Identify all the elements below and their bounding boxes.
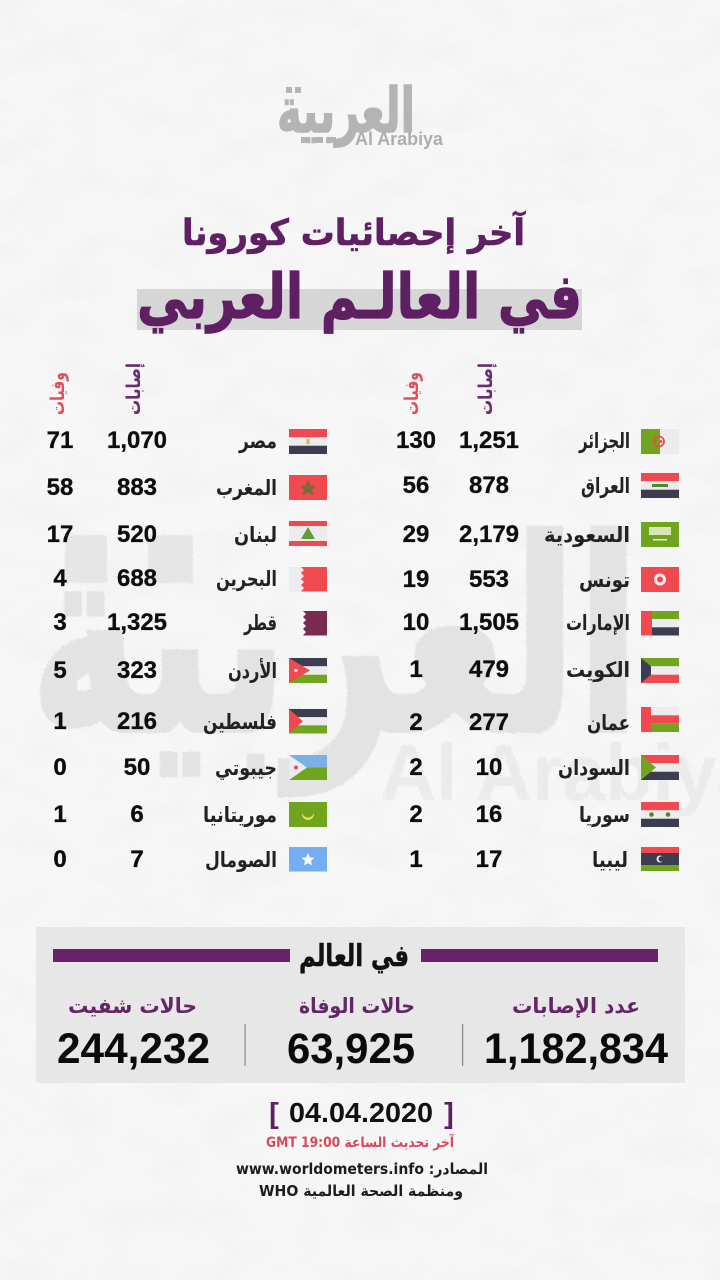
sources: المصادر: www.worldometers.info [236,1160,488,1178]
row: Libya: 1 [409,846,423,873]
row: Oman: 277 [469,709,509,736]
row: Kuwait: 479 [469,656,509,683]
panel: world stats [36,927,685,1083]
row: Saudi Arabia: 29 [403,521,429,548]
row: Sudan: 10 [476,754,502,781]
row: Syria: 2 [409,801,423,828]
row: Syria: سوريا [579,803,630,827]
row: Djibouti [53,754,327,781]
left table [47,427,327,873]
date: 04.04.2020 [289,1097,433,1128]
left table headers: إصابات [123,363,145,415]
stat: deaths: حالات الوفاة [299,994,415,1018]
stat: recovered [57,994,210,1073]
row: Egypt: 71 [47,427,73,454]
row: Bahrain [53,565,327,592]
row: Egypt [47,427,327,454]
row: Tunisia: 19 [403,566,429,593]
row: Jordan: 323 [117,657,157,684]
sources: ومنظمة الصحة العالمية WHO [259,1182,463,1200]
row: Tunisia: تونس [579,568,630,592]
logo: Al Arabiya: العربية [277,74,415,147]
row: Palestine: 1 [53,708,67,735]
row: Bahrain: البحرين [216,567,277,591]
row: Jordan [53,657,327,684]
row: Mauritania: 6 [130,801,144,828]
title line 1: آخر إحصائيات كورونا [182,210,527,254]
row: Somalia [53,846,327,873]
row: Sudan: السودان [558,756,630,780]
divider [244,1024,246,1066]
row: Jordan: 5 [53,657,67,684]
row: Djibouti: 0 [53,754,67,781]
row: Somalia: الصومال [205,848,277,872]
row: Sudan [409,754,679,781]
row: Mauritania [53,801,327,828]
logo: Al Arabiya: Al Arabiya [355,129,444,149]
row: Iraq: العراق [581,474,630,498]
world heading with bars: في العالم [299,939,409,974]
left table headers: وفيات [47,372,69,415]
row: Mauritania: موريتانيا [203,803,277,827]
row: Somalia: 7 [130,846,144,873]
row: Palestine: 216 [117,708,157,735]
row: Qatar [53,609,327,636]
row: Saudi Arabia: 2,179 [459,521,519,548]
row: Libya: ليبيا [592,848,628,872]
date: [ [269,1098,279,1130]
stat: infections: عدد الإصابات [512,994,640,1018]
row: Somalia: 0 [53,846,67,873]
row: Morocco: المغرب [216,476,277,500]
stat: recovered: حالات شفيت [68,994,197,1018]
title line 2 with grey band: في العالـم العربي [137,260,582,333]
row: Algeria: الجزائر [578,429,630,453]
row: Kuwait: 1 [409,656,423,683]
row: Syria: 16 [476,801,502,828]
row: Kuwait [409,656,679,683]
right table [396,427,679,873]
row: Iraq [403,472,679,499]
row: Oman: عمان [587,711,630,735]
row: Qatar: 1,325 [107,609,167,636]
right table headers: وفيات [401,372,423,415]
row: Palestine [53,708,327,735]
row: Iraq: 56 [403,472,429,499]
row: UAE: 10 [403,609,429,636]
row: Morocco: 883 [117,474,157,501]
row: UAE: 1,505 [459,609,519,636]
left table headers [47,363,145,415]
stat: infections: 1,182,834 [484,1025,668,1073]
row: Saudi Arabia [403,521,679,548]
row: Sudan: 2 [409,754,423,781]
right table headers [401,363,497,415]
divider [462,1024,463,1066]
row: Palestine: فلسطين [203,710,277,734]
row: Qatar: 3 [53,609,67,636]
sources [236,1160,488,1200]
row: Djibouti: جيبوتي [215,756,277,780]
row: Lebanon: لبنان [234,523,277,547]
row: Morocco [47,474,327,501]
row: Oman [409,707,679,736]
row: Iraq: 878 [469,472,509,499]
right table headers: إصابات [475,363,497,415]
row: Algeria [396,427,679,454]
row: Libya [409,846,679,873]
row: Tunisia [403,566,679,593]
row: Kuwait: الكويت [566,658,630,682]
update time: آخر تحديث الساعة 19:00 GMT [266,1133,455,1151]
date: ] [444,1098,454,1130]
stat: deaths: 63,925 [287,1025,415,1073]
row: Lebanon: 520 [117,521,157,548]
row: Bahrain: 688 [117,565,157,592]
row: Jordan: الأردن [228,657,277,683]
row: Djibouti: 50 [124,754,150,781]
row: UAE [403,609,679,636]
row: Syria [409,801,679,828]
row: Libya: 17 [476,846,502,873]
row: Algeria: 1,251 [459,427,519,454]
row: Lebanon: 17 [47,521,73,548]
row: Qatar: قطر [243,611,277,635]
row: UAE: الإمارات [566,611,630,635]
world heading with bars [53,939,658,974]
row: Tunisia: 553 [469,566,509,593]
stat: deaths [287,994,415,1073]
row: Egypt: 1,070 [107,427,167,454]
stat: infections [484,994,668,1073]
row: Algeria: 130 [396,427,436,454]
row: Saudi Arabia: السعودية [544,523,630,547]
row: Mauritania: 1 [53,801,67,828]
row: Bahrain: 4 [53,565,67,592]
row: Lebanon [47,521,327,548]
row: Egypt: مصر [238,429,277,453]
row: Oman: 2 [409,709,423,736]
row: Morocco: 58 [47,474,73,501]
stat: recovered: 244,232 [57,1025,210,1073]
